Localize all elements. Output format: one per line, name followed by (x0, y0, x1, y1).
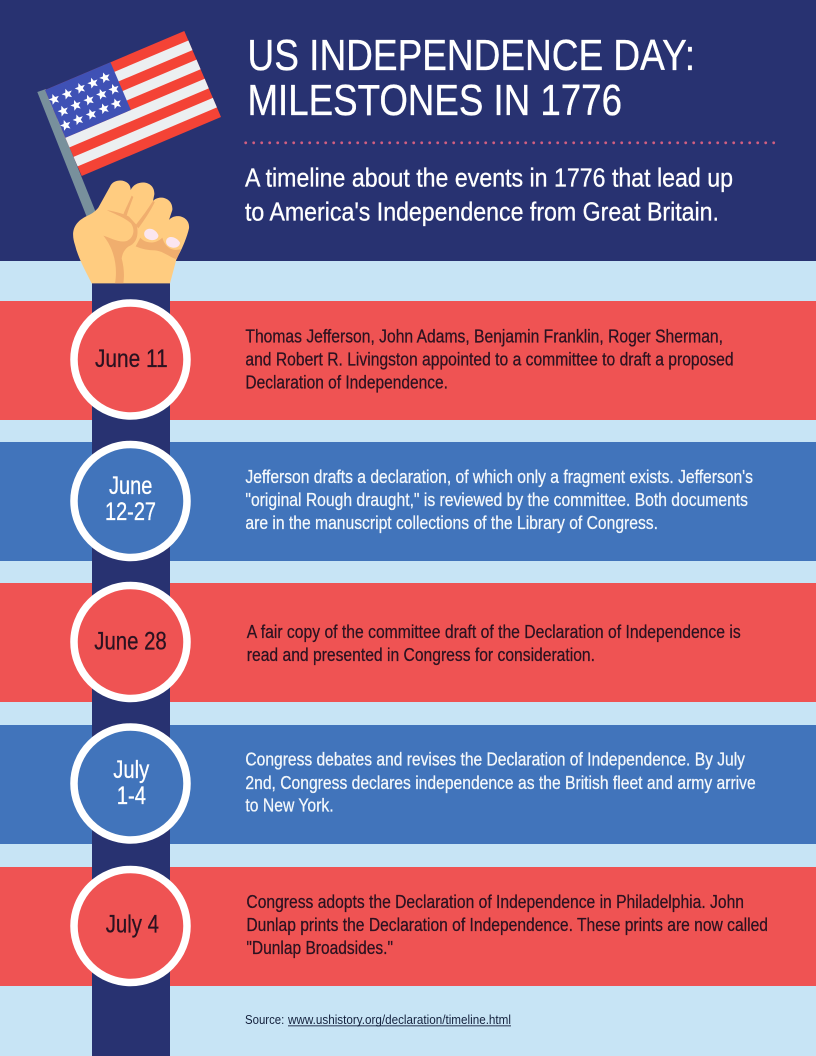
description: June 28 (247, 622, 741, 665)
title: MILESTONES IN 1776 (248, 77, 622, 125)
dotted divider (246, 141, 776, 144)
band: June 12-27 (0, 442, 816, 561)
description: June 12-27 (245, 467, 753, 533)
band: July 1-4 (0, 725, 816, 844)
source line: Source: (245, 1012, 284, 1027)
subtitle: A timeline about the events in 1776 that lead up (245, 163, 733, 193)
timeline column (92, 283, 170, 1056)
description: July 1-4: 2nd, Congress declares independence as the British fleet and army arrive (245, 773, 756, 793)
marker: July 1-4: 1-4 (117, 782, 146, 810)
subtitle: to America's Independence from Great Britain. (245, 197, 719, 227)
description: June 11: Thomas Jefferson, John Adams, Benjamin Franklin, Roger Sherman, (245, 327, 723, 347)
marker: June 11 (74, 303, 187, 416)
source line: www.ushistory.org/declaration/timeline.html (287, 1012, 511, 1027)
marker: June 11: June 11 (95, 345, 168, 373)
description: June 12-27: are in the manuscript collections of the Library of Congress. (245, 513, 658, 533)
band: July 4 (0, 867, 816, 986)
flag stripes (45, 31, 221, 176)
description: June 28: A fair copy of the committee draft of the Declaration of Independence is (247, 622, 741, 642)
marker: June 12-27: June (109, 472, 152, 500)
description: June 11: and Robert R. Livingston appointed to a committee to draft a proposed (245, 350, 734, 370)
marker: June 28 (74, 586, 187, 698)
description: July 1-4: to New York. (245, 796, 334, 816)
marker: June 12-27: 12-27 (105, 498, 156, 526)
marker: July 1-4: July (113, 756, 150, 784)
marker: June 28: June 28 (94, 627, 167, 655)
marker: July 4: July 4 (106, 911, 159, 939)
description: June 12-27: Jefferson drafts a declaration, of which only a fragment exists. Jefferson's (245, 467, 753, 487)
band: June 28 (0, 583, 816, 702)
flag stars (47, 71, 123, 131)
header panel (0, 0, 816, 261)
title: US INDEPENDENCE DAY: (248, 32, 695, 80)
description: June 11: Declaration of Independence. (245, 373, 448, 393)
description: July 1-4: Congress debates and revises the Declaration of Independence. By July (245, 750, 745, 770)
flag pole (37, 89, 96, 217)
description: June 28: read and presented in Congress for consideration. (247, 645, 595, 665)
description: July 4: Congress adopts the Declaration of Independence in Philadelphia. John (246, 892, 744, 912)
marker: July 1-4 (74, 727, 187, 840)
band: June 11 (0, 301, 816, 420)
title (248, 32, 695, 125)
marker: June 12-27 (74, 444, 187, 558)
fingernails (144, 229, 158, 240)
description: July 4 (246, 892, 768, 958)
description: July 1-4 (245, 750, 756, 816)
description: July 4: "Dunlap Broadsides." (246, 938, 393, 958)
subtitle (245, 163, 733, 227)
hand (73, 181, 189, 283)
marker: July 4 (74, 870, 187, 982)
icon: flag held in hand (37, 31, 221, 283)
description: June 11 (245, 327, 734, 393)
description: June 12-27: "original Rough draught," is reviewed by the committee. Both documents (245, 490, 748, 510)
